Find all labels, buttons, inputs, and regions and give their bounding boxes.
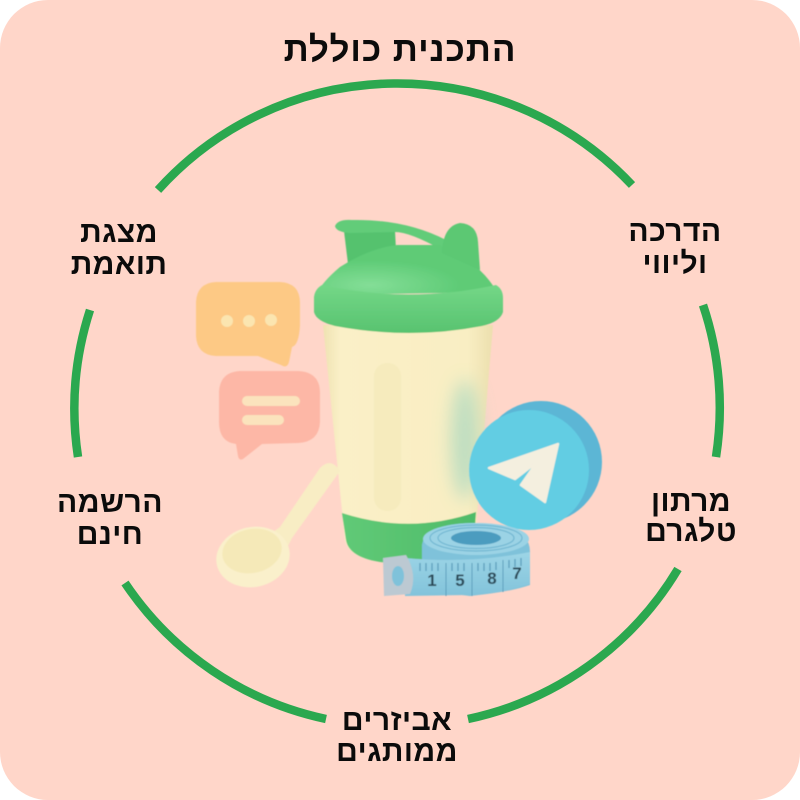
label: top left <box>71 216 167 281</box>
label: bottom left: חינם <box>77 518 143 551</box>
icon: measuring scoop <box>211 463 340 594</box>
title: התכנית כוללת <box>284 30 516 69</box>
icon: orange chat bubble <box>196 282 300 366</box>
label: bottom right: טלגרם <box>645 515 737 548</box>
arc: left <box>74 310 90 457</box>
illustration: shaker and accessories <box>196 220 602 596</box>
icon: measuring tape <box>383 523 530 596</box>
icon: shaker cup <box>314 220 503 564</box>
tape number 5: 5 <box>455 571 465 590</box>
tape number 7: 7 <box>512 564 522 583</box>
label: bottom right <box>645 485 737 548</box>
tape number 8: 8 <box>487 569 497 588</box>
label: bottom right: מרתון <box>651 485 731 518</box>
label: top right: הדרכה <box>628 215 722 248</box>
label: bottom left: הרשמה <box>57 486 163 519</box>
tape number 1: 1 <box>427 571 437 590</box>
label: bottom: ממותגים <box>336 735 458 768</box>
label: bottom: אביזרים <box>342 704 452 737</box>
label: bottom <box>336 704 458 768</box>
arc: top <box>158 83 632 190</box>
label: top right: וליווי <box>642 247 708 280</box>
label: top left: תואמת <box>71 248 167 281</box>
icon: telegram badge <box>469 401 602 530</box>
arc: right <box>703 305 720 457</box>
icon: pink chat bubble <box>219 371 320 460</box>
label: top right <box>628 215 722 280</box>
arc: bottom right <box>468 569 678 719</box>
arc: bottom left <box>125 583 326 719</box>
label: bottom left <box>57 486 163 551</box>
label: top left: מצגת <box>80 216 158 249</box>
circular ring of arcs <box>74 83 720 719</box>
